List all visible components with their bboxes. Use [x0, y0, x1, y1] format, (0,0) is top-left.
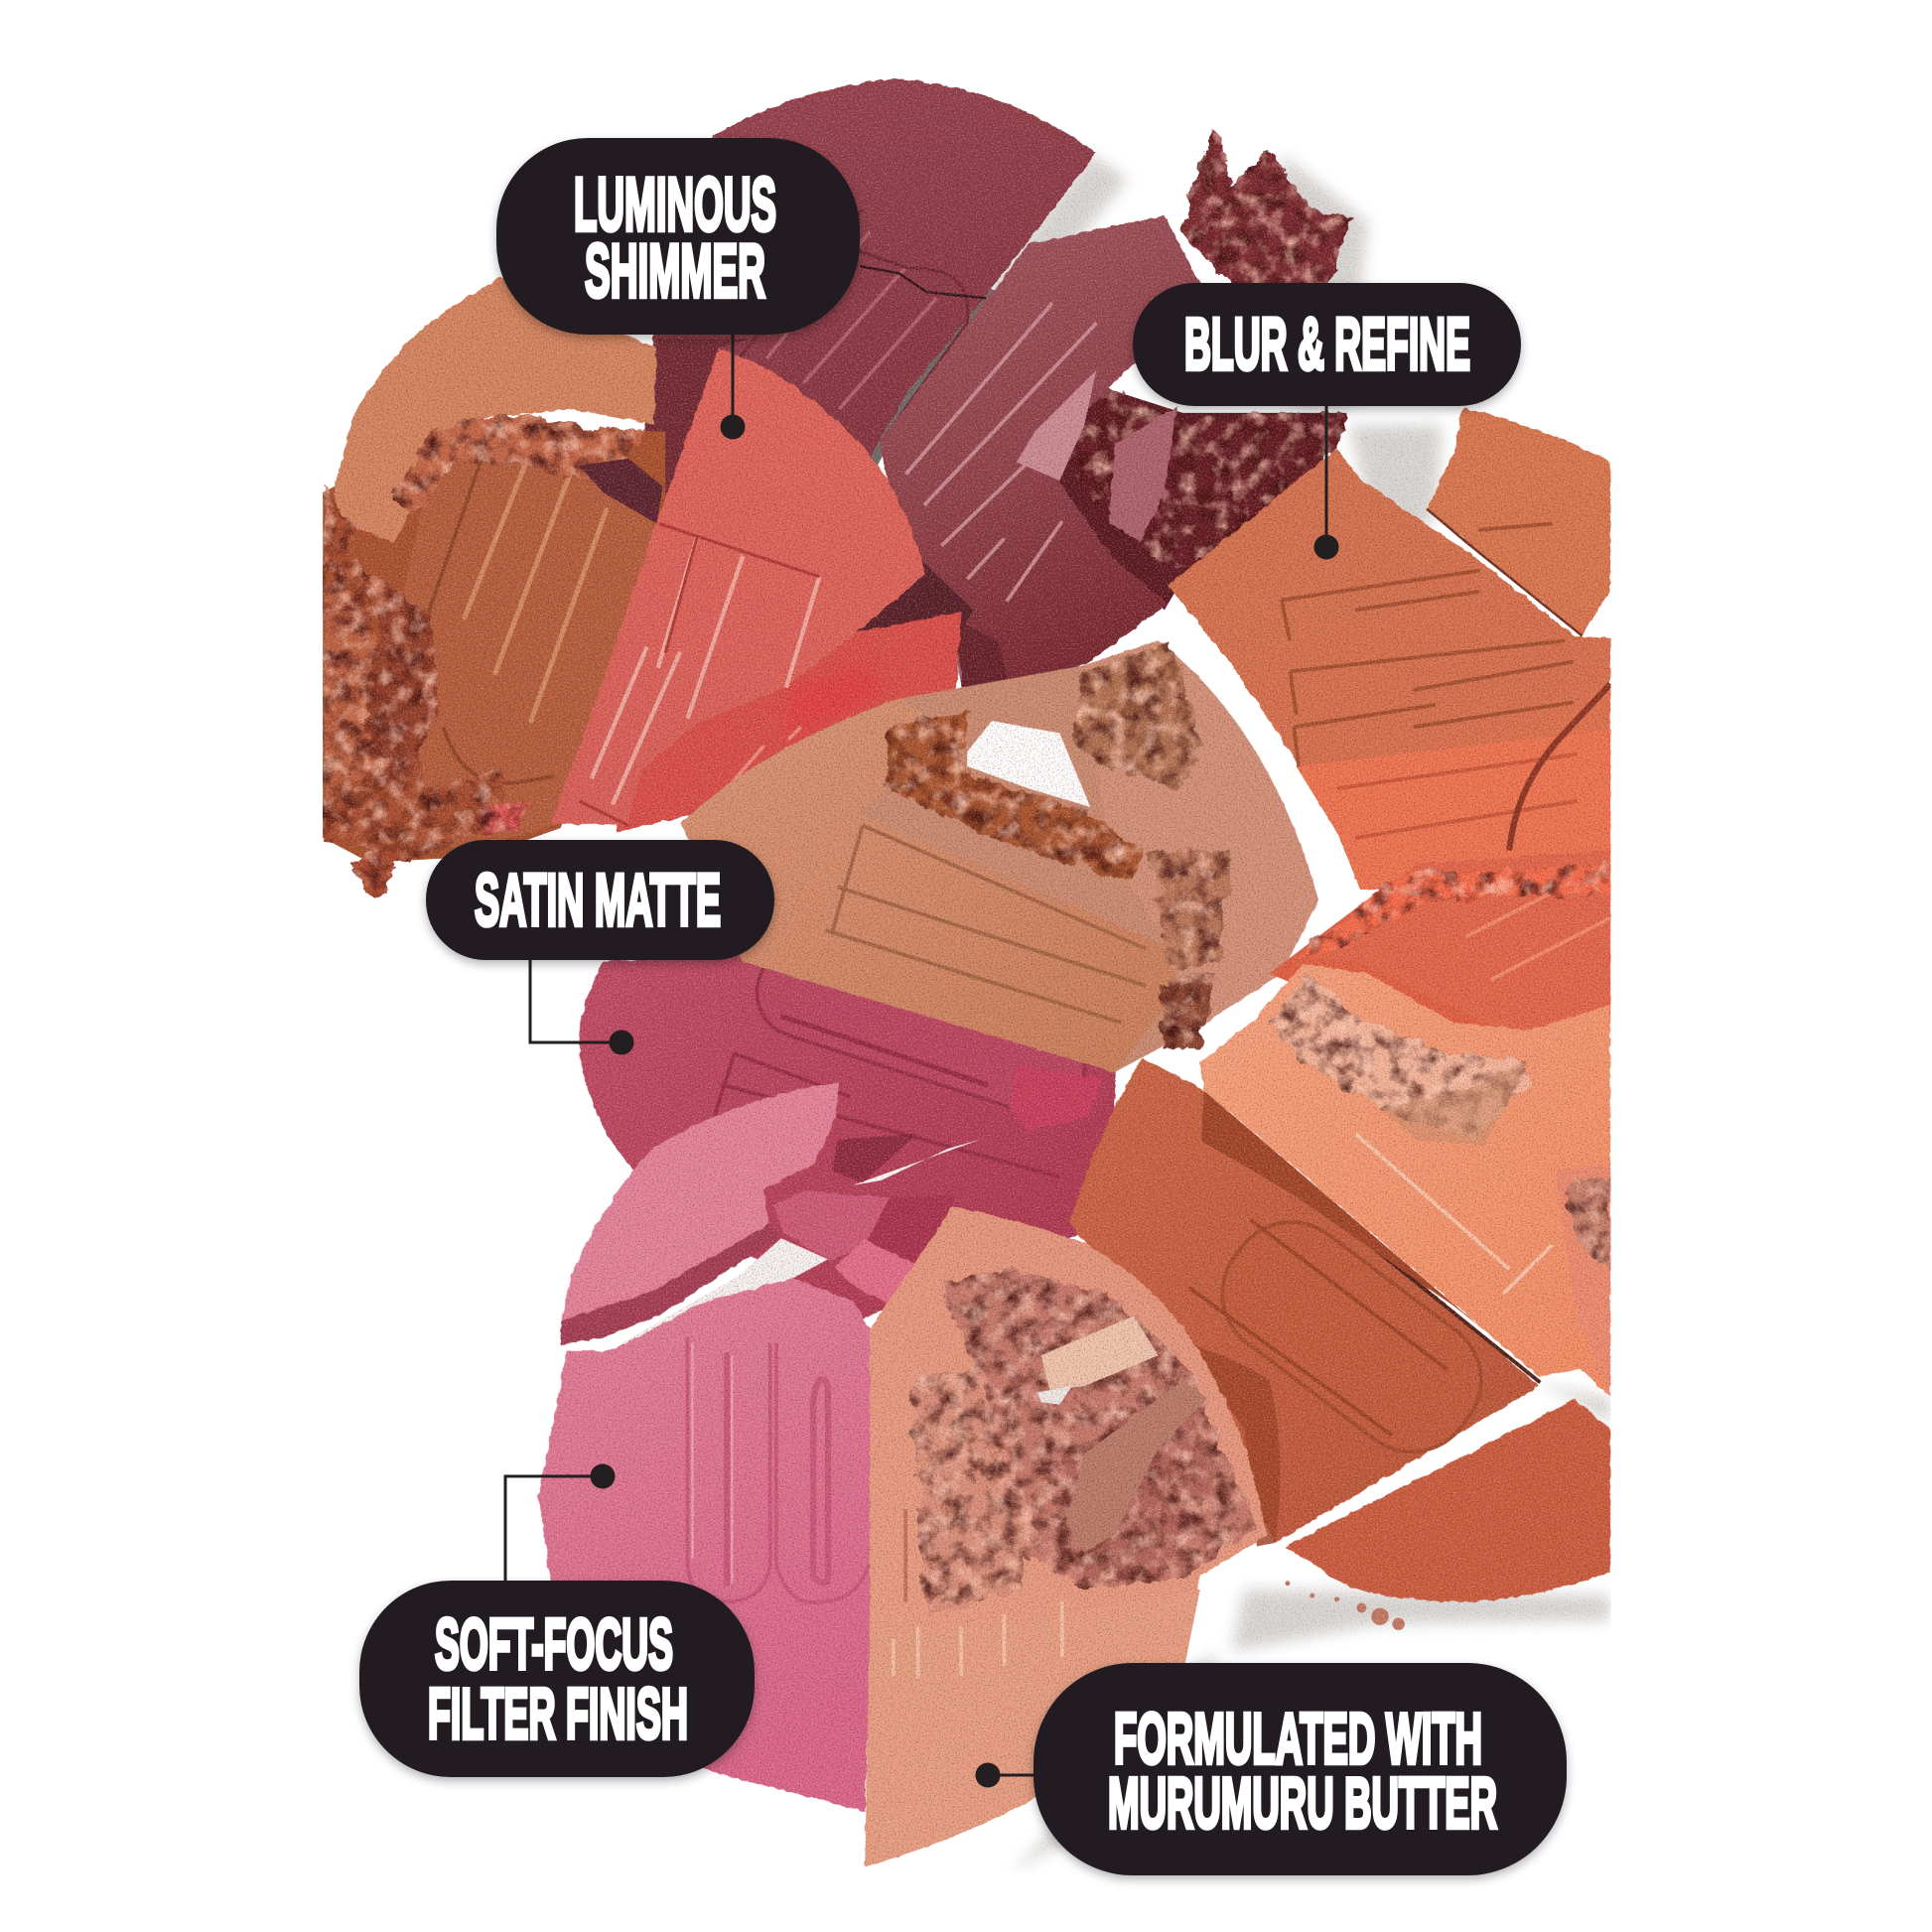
backdrop gap between pink pieces — [622, 1238, 828, 1353]
label text: SATIN MATTE — [475, 859, 721, 941]
callout: blur and refine — [1133, 283, 1521, 560]
label text: FORMULATED WITH — [1114, 1700, 1482, 1779]
pan: mauve shimmer centre — [880, 215, 1201, 697]
flake: pale highlight shard — [1041, 1315, 1159, 1390]
callout: satin matte — [426, 840, 774, 1054]
photo: broken blush pans collage — [323, 78, 1610, 1870]
pan: bright coral under shimmer — [617, 612, 961, 832]
crumble: dark shard between pans — [579, 459, 663, 523]
pill — [359, 1581, 755, 1777]
pan: terracotta wedge bottom right — [1285, 1400, 1610, 1601]
crumbled powder: tan pan tear — [888, 640, 1232, 1047]
pan: terracotta stamped left — [403, 461, 659, 848]
pan: apricot shimmer right — [1200, 964, 1610, 1396]
pill — [496, 138, 860, 335]
pan: salmon shimmer left — [336, 277, 656, 542]
crumbled powder: peach pan tear — [911, 1269, 1257, 1614]
chip: mauve pink shard — [773, 1190, 890, 1261]
slit: thin shadow between plum and mauve pans — [870, 288, 995, 465]
leader line and dot — [975, 1763, 1042, 1787]
callout: formulated with murumuru butter — [975, 1663, 1567, 1875]
drop shadows on the white backdrop — [973, 154, 1610, 1872]
pill — [1034, 1663, 1567, 1875]
pan: deep rose gap detail — [865, 1195, 955, 1269]
label text: FILTER FINISH — [428, 1675, 688, 1754]
backdrop gap inside tan pan — [967, 721, 1090, 807]
pan: terracotta matte lower right — [1069, 1057, 1540, 1547]
pan: dark burgundy crumbles — [1068, 129, 1354, 572]
pan: light pink top with torn underside — [561, 1082, 839, 1345]
pan: coral orange top right — [1169, 408, 1610, 890]
callout: soft-focus filter finish — [359, 1463, 755, 1777]
pill — [1133, 283, 1521, 406]
chip: bright pink crumb — [834, 1240, 920, 1309]
pan: tan shimmer with torn centre — [681, 640, 1318, 1072]
crumbled powder: left edge and torn rim — [323, 413, 640, 894]
shadow: under coral shimmer on mauve — [850, 557, 973, 647]
base: dark burgundy backing — [1041, 369, 1345, 610]
pan: coral shimmer with indicator — [551, 348, 925, 826]
label text: LUMINOUS — [574, 163, 776, 247]
flake: mauve shimmer shard — [1066, 1380, 1207, 1553]
leader line and dot — [530, 953, 633, 1054]
label text: MURUMURU BUTTER — [1108, 1764, 1497, 1844]
label text: SHIMMER — [585, 229, 765, 314]
pan: rose satin matte — [579, 933, 1115, 1318]
crumbs: scattered powder — [1285, 1581, 1405, 1630]
pill — [426, 840, 774, 960]
pan: peach shimmer with torn centre — [865, 1206, 1267, 1866]
callout: luminous shimmer — [496, 138, 860, 439]
leader line and dot — [1314, 397, 1338, 560]
base: red-brown backing on the left — [323, 431, 665, 863]
leader line and dot — [721, 328, 745, 439]
label text: BLUR & REFINE — [1184, 303, 1470, 385]
leader line and dot — [505, 1463, 616, 1588]
pan: bright coral top right torn — [1269, 850, 1610, 1047]
pan: plum shimmer top — [640, 78, 1097, 517]
pan: pink matte lower with UO emboss — [538, 1278, 873, 1811]
gap: backdrop inside peach pan — [1037, 1386, 1072, 1405]
label text: SOFT-FOCUS — [435, 1605, 673, 1685]
